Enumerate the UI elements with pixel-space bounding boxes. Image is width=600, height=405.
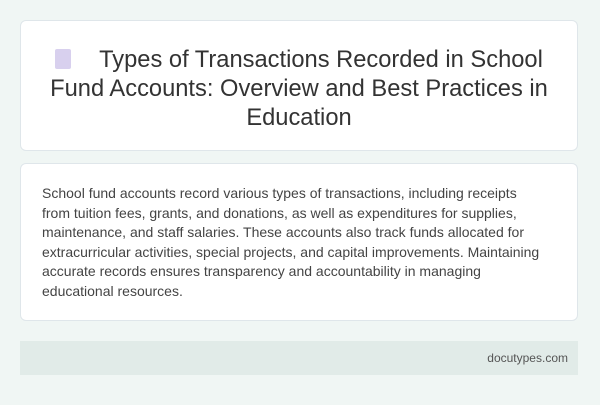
- text block: School fund accounts record various types of transactions, including receipts from tuition fees, grants, and donations, as well as expenditures for supplies, maintenance, and staff salaries. These accounts also track funds allocated for extracurricular activities, special projects, and capital improvements. Maintaining accurate records ensures transparency and accountability in managing educational resources.: [42, 185, 539, 298]
- panel: title: [20, 20, 578, 151]
- title: Types of Transactions Recorded in School Fund Accounts: Overview and Best Practices in Education: [50, 47, 548, 131]
- panel: description: [20, 163, 578, 321]
- icon: receipt: [55, 49, 71, 69]
- footer text: docutypes.com: [487, 351, 568, 365]
- footer: [20, 341, 578, 375]
